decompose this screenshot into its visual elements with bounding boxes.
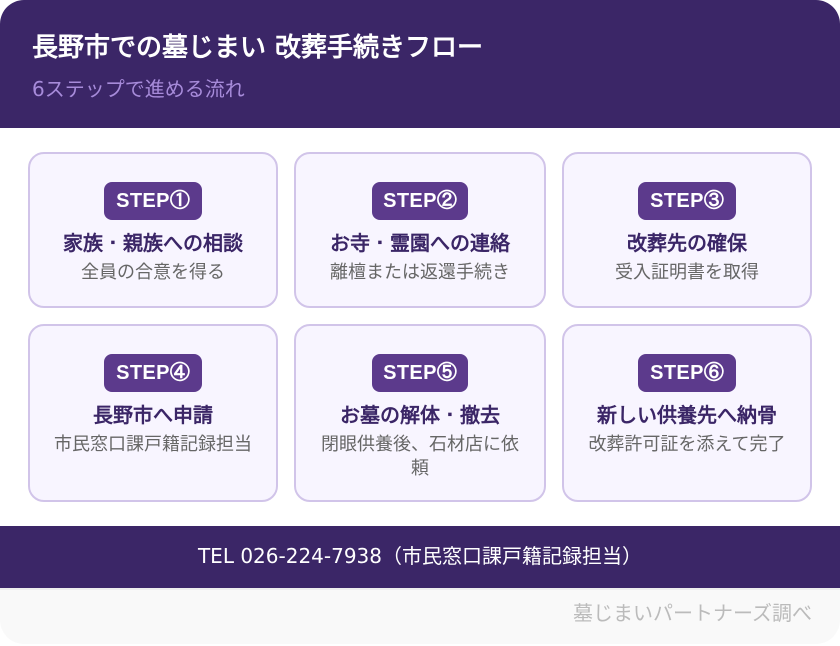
panel: step 4: [28, 324, 278, 502]
step 6 badge: [638, 354, 736, 392]
source footer: 墓じまいパートナーズ調べ: [573, 601, 812, 625]
step 4 badge: STEP④: [116, 362, 190, 384]
step 3 badge: [638, 182, 736, 220]
step 6 heading: 新しい供養先へ納骨: [597, 403, 777, 427]
panel: step 1: [28, 152, 278, 308]
step 6 description: 改葬許可証を添えて完了: [588, 434, 786, 455]
step 4 heading: 長野市へ申請: [93, 403, 213, 427]
step 3 heading: 改葬先の確保: [627, 231, 747, 255]
step 3 badge: STEP③: [650, 190, 724, 212]
step 4 badge: [104, 354, 202, 392]
source footer: [0, 588, 840, 644]
step 2 badge: [372, 182, 468, 220]
subtitle: 6ステップで進める流れ: [32, 77, 245, 101]
panel: step 3: [562, 152, 812, 308]
step 1 badge: STEP①: [116, 190, 190, 212]
title: 長野市での墓じまい 改葬手続きフロー: [32, 33, 483, 63]
step 5 badge: STEP⑤: [383, 362, 457, 384]
panel: step 2: [294, 152, 546, 308]
step 1 description: 全員の合意を得る: [81, 262, 225, 283]
contact bar: [0, 526, 840, 588]
step 3 description: 受入証明書を取得: [615, 262, 759, 283]
step 4 description: 市民窓口課戸籍記録担当: [54, 434, 252, 455]
step 1 heading: 家族・親族への相談: [63, 231, 243, 255]
step 5 badge: [372, 354, 468, 392]
panel: step 6: [562, 324, 812, 502]
contact bar: TEL 026-224-7938（市民窓口課戸籍記録担当）: [198, 544, 642, 568]
step 1 badge: [104, 182, 202, 220]
header band: [0, 0, 840, 128]
step 2 description: 離檀または返還手続き: [330, 262, 510, 283]
panel: step 5: [294, 324, 546, 502]
step 6 badge: STEP⑥: [650, 362, 724, 384]
step 5 description: 閉眼供養後、石材店に依頼: [321, 434, 519, 479]
step 2 heading: お寺・霊園への連絡: [330, 231, 510, 255]
step 2 badge: STEP②: [383, 190, 457, 212]
step 5 heading: お墓の解体・撤去: [340, 403, 500, 427]
